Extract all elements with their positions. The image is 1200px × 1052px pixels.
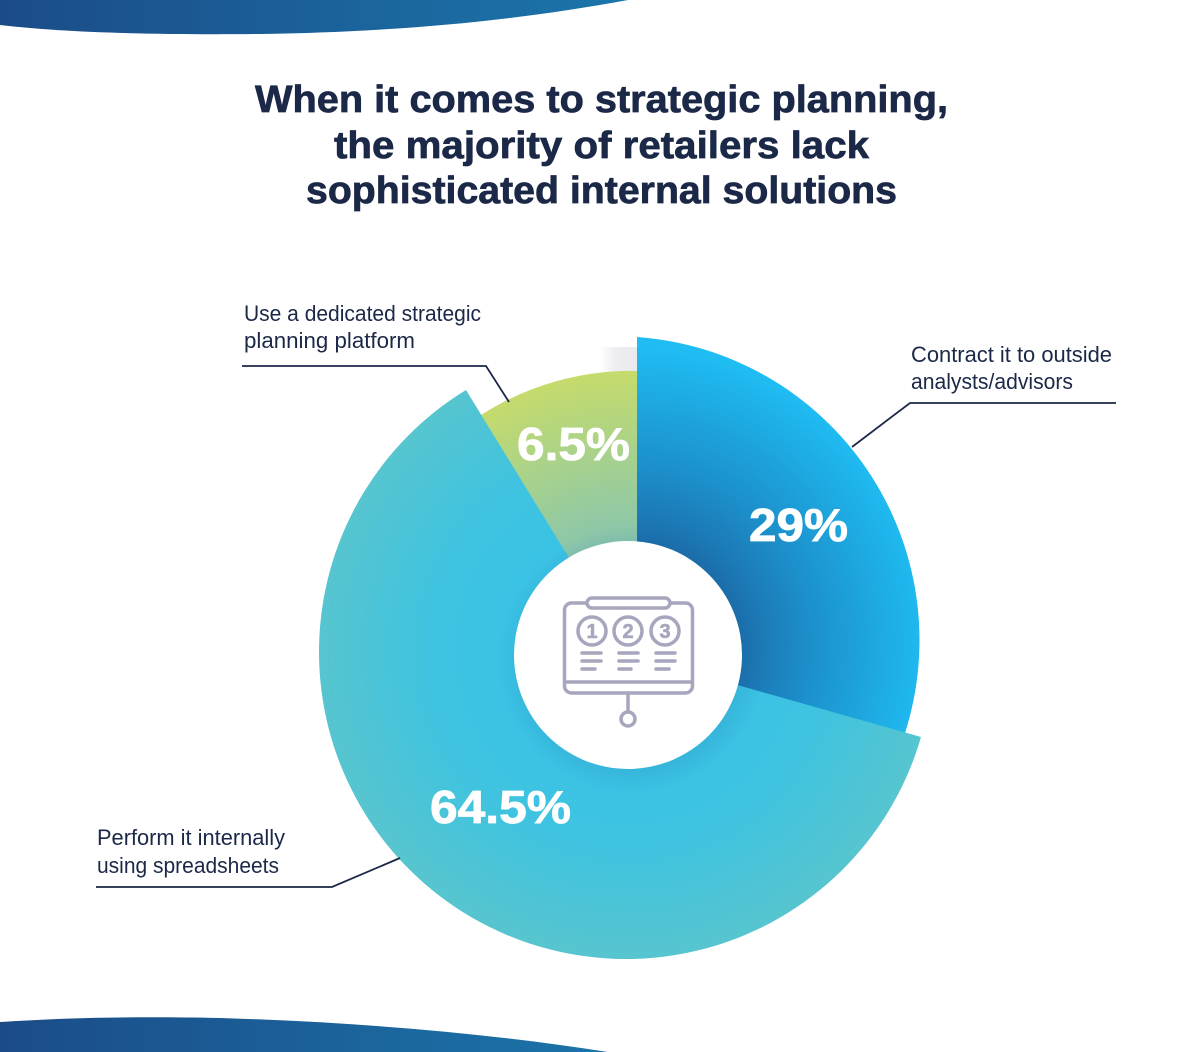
- hole shadow: [497, 525, 767, 795]
- segment: internal spreadsheets 64.5%: [319, 390, 921, 959]
- segment: dedicated platform 6.5%: [481, 371, 638, 650]
- value: 64.5%: 64.5%: [430, 781, 571, 833]
- icon: presentation board: 2: [622, 621, 634, 643]
- donut chart: [319, 337, 921, 959]
- label: internal spreadsheets: using spreadsheets: [97, 853, 279, 878]
- label: outside analysts: analysts/advisors: [911, 369, 1073, 394]
- icon: presentation board: [564, 598, 692, 726]
- center circle: [514, 541, 742, 769]
- top wave banner: [0, 0, 628, 34]
- title: [255, 79, 948, 212]
- title: sophisticated internal solutions: [306, 170, 897, 212]
- ghost shadow above green segment: [600, 347, 637, 374]
- value: 29%: 29%: [749, 499, 848, 551]
- label: dedicated platform: Use a dedicated strategic: [244, 301, 481, 326]
- title: the majority of retailers lack: [334, 125, 870, 167]
- label: dedicated platform: planning platform: [244, 328, 415, 353]
- icon: presentation board: 1: [586, 621, 598, 643]
- segment: outside analysts 29%: [628, 337, 919, 733]
- value: 6.5%: 6.5%: [517, 418, 630, 470]
- label: internal spreadsheets: [96, 825, 400, 887]
- label: outside analysts: Contract it to outside: [911, 342, 1112, 367]
- label: dedicated platform: [242, 301, 509, 402]
- bottom wave banner: [0, 1017, 608, 1052]
- label: outside analysts: [852, 342, 1116, 447]
- icon: presentation board: 3: [659, 621, 671, 643]
- label: internal spreadsheets: Perform it internally: [97, 825, 285, 850]
- title: When it comes to strategic planning,: [255, 79, 948, 121]
